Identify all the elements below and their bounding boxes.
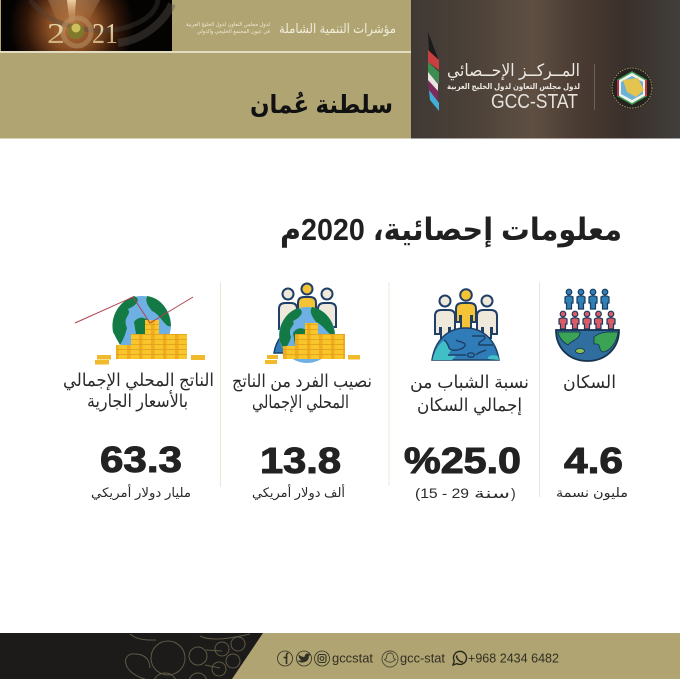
panel: GDP	[63, 296, 214, 501]
footer	[0, 633, 680, 679]
phone number: +968 2434 6482	[468, 652, 559, 666]
logo ribbon	[428, 32, 439, 111]
panel: GCC-STAT logo	[411, 0, 680, 138]
unit: (15 - 29	[415, 485, 469, 501]
icon: globe, coins and trend line	[75, 296, 205, 364]
label: بالأسعار الجارية	[87, 390, 188, 411]
label	[410, 372, 529, 416]
gold footer band	[232, 633, 680, 679]
unit	[415, 485, 516, 501]
icon: GCC emblem	[611, 67, 653, 109]
icon: whatsapp	[453, 651, 467, 665]
label: السكان	[563, 372, 616, 392]
header photo: 2021 emblem: 2	[47, 18, 65, 50]
panel: population	[556, 289, 628, 501]
header photo: 2021 emblem: 21	[92, 18, 118, 50]
main heading: معلومات إحصائية، 2020م	[280, 212, 622, 248]
label: نسبة الشباب من	[410, 372, 529, 392]
label: إجمالي السكان	[417, 395, 522, 416]
footer circle pattern	[126, 634, 250, 679]
unit: ألف دولار أمريكي	[252, 484, 345, 501]
label: الناتج المحلي الإجمالي	[63, 370, 214, 391]
header caption small: في عيون المجتمع الخليجي والدولي	[197, 29, 270, 35]
header caption small: لدول مجلس التعاون لدول الخليج العربية	[186, 22, 270, 28]
icon: three people on globe	[432, 289, 499, 360]
panel: GDP per capita	[232, 284, 372, 501]
value: 13.8	[260, 440, 341, 481]
icon: people on half globe	[556, 289, 619, 361]
handle: gcc-stat	[400, 652, 446, 666]
unit: سنة	[474, 485, 510, 501]
label: نصيب الفرد من الناتج	[232, 371, 372, 392]
header band	[0, 0, 680, 138]
logo arabic subtitle: لدول مجلس التعاون لدول الخليج العربية	[447, 82, 580, 92]
value: 4.6	[564, 440, 623, 481]
icon: snapchat	[382, 651, 398, 667]
panel: youth share	[404, 289, 529, 501]
column dividers	[220, 282, 540, 497]
unit: )	[511, 485, 516, 501]
social icons	[278, 651, 330, 666]
handle: gccstat	[332, 652, 374, 666]
logo arabic name: المــركــز الإحــصائي	[447, 61, 580, 81]
country heading: سلطنة عُمان	[250, 91, 393, 119]
value: %25.0	[404, 440, 521, 481]
unit: مليار دولار أمريكي	[91, 484, 191, 501]
header caption: indicators: مؤشرات التنمية الشاملة	[279, 21, 396, 37]
label	[232, 371, 372, 413]
header caption small	[186, 22, 270, 35]
logo latin name: GCC-STAT	[491, 91, 578, 113]
value: 63.3	[100, 439, 182, 480]
unit: مليون نسمة	[556, 485, 628, 501]
label: المحلي الإجمالي	[252, 392, 349, 413]
label	[63, 370, 214, 411]
header photo: 2021 emblem	[1, 0, 172, 51]
icon: people, globe and coins	[265, 284, 360, 364]
